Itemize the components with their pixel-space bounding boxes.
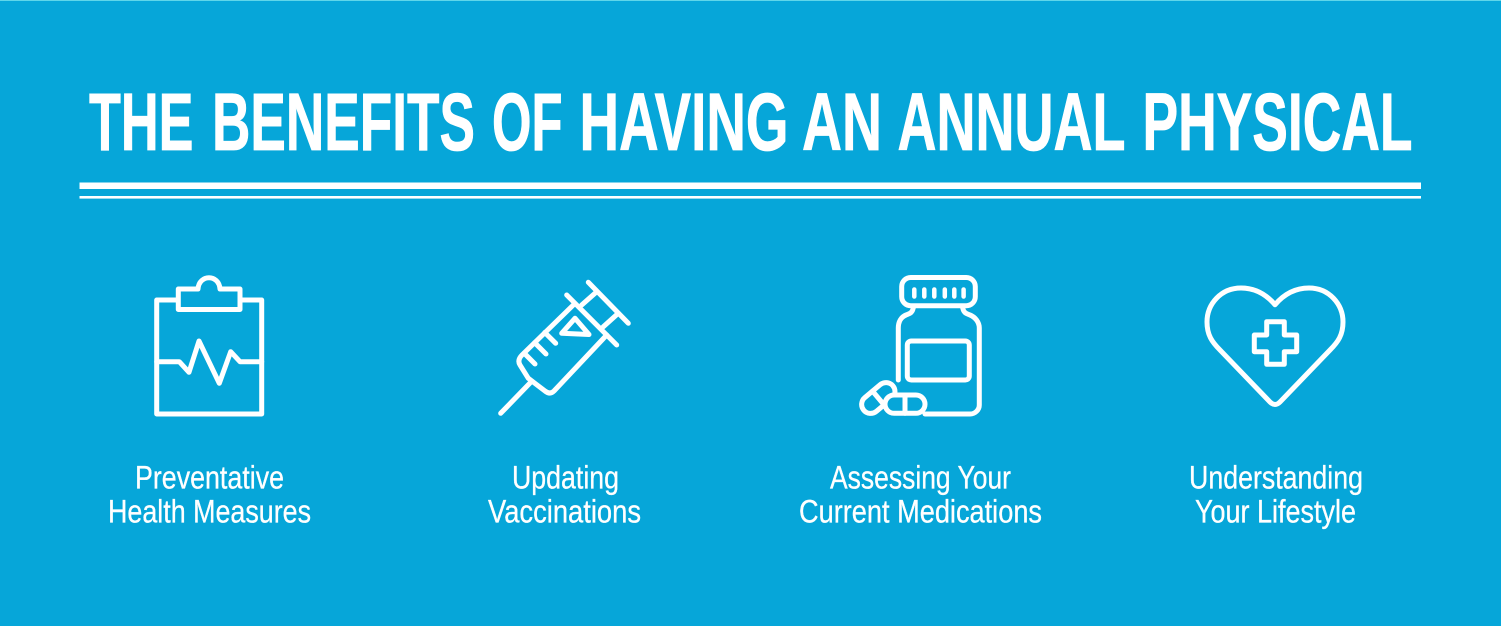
title: THE xyxy=(89,77,194,168)
panel: updating vaccinations xyxy=(488,282,641,530)
label: updating vaccinations: Updating xyxy=(512,460,619,496)
icon: medicine bottle with pills xyxy=(858,278,979,417)
title: BENEFITS xyxy=(212,77,475,168)
label: understanding your lifestyle xyxy=(1189,460,1363,530)
label: understanding your lifestyle: Understanding xyxy=(1189,460,1363,496)
icon: heart with medical cross xyxy=(1207,288,1343,404)
label: preventative health measures: Preventative xyxy=(135,460,284,496)
icon: clipboard with heartbeat xyxy=(157,278,262,414)
label: assessing your current medications: Current Medications xyxy=(799,494,1042,530)
title xyxy=(89,77,1412,168)
title: ANNUAL xyxy=(898,77,1126,168)
title double rule xyxy=(80,182,1421,199)
label: preventative health measures xyxy=(108,460,311,530)
title: AN xyxy=(802,77,882,168)
label: preventative health measures: Health Measures xyxy=(108,494,311,530)
label: understanding your lifestyle: Your Lifestyle xyxy=(1195,494,1356,530)
label: assessing your current medications: Assessing Your xyxy=(830,460,1011,496)
panel: preventative health measures xyxy=(108,278,311,530)
panel: understanding your lifestyle xyxy=(1189,288,1363,530)
label: assessing your current medications xyxy=(799,460,1042,530)
panel: assessing your current medications xyxy=(799,278,1042,530)
title: OF xyxy=(492,77,562,168)
icon: syringe xyxy=(501,282,628,413)
label: updating vaccinations xyxy=(488,460,641,530)
label: updating vaccinations: Vaccinations xyxy=(488,494,641,530)
title: HAVING xyxy=(580,77,788,168)
